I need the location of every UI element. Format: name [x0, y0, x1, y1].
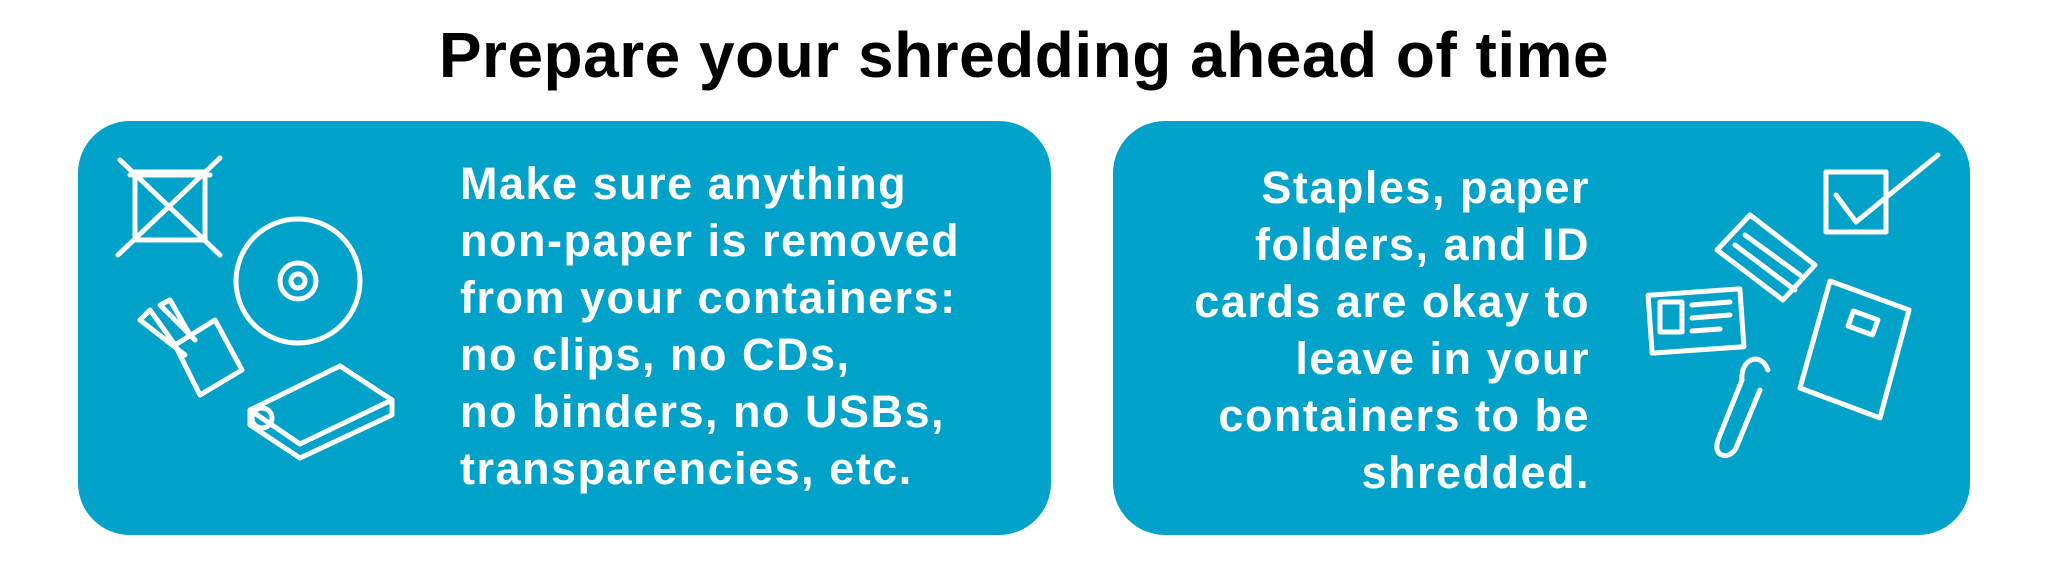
text: okay items: shredded. [1361, 447, 1590, 498]
text: remove non-paper items: from your containers: [460, 272, 957, 323]
text: remove non-paper items: no binders, no USBs, [460, 386, 945, 437]
icon: ring binder [250, 366, 392, 458]
text: remove non-paper items: no clips, no CDs, [460, 329, 851, 380]
text: okay items: Staples, paper [1261, 162, 1590, 213]
text: remove non-paper items: Make sure anything [460, 158, 907, 209]
icon: binder clip [140, 300, 242, 395]
text: remove non-paper items: non-paper is removed [460, 215, 960, 266]
text: okay items: containers to be [1218, 390, 1590, 441]
text: remove non-paper items [460, 158, 960, 494]
icon: crossed box [118, 158, 220, 255]
text: remove non-paper items: transparencies, etc. [460, 443, 913, 494]
text: okay items: leave in your [1295, 333, 1590, 384]
icon: ID card [1648, 289, 1744, 353]
text: okay items: folders, and ID [1255, 219, 1590, 270]
icon: checked box [1826, 155, 1938, 232]
text: okay items: cards are okay to [1194, 276, 1590, 327]
text: okay items [1194, 162, 1590, 498]
icon: credit card [1717, 215, 1815, 300]
icon: paper clip [1717, 359, 1768, 456]
title: Prepare your shredding ahead of time [439, 19, 1609, 91]
panel: remove non-paper [78, 121, 1051, 535]
icon: notebook [1800, 281, 1909, 418]
icon: CD [236, 219, 360, 343]
panel: okay to leave [1113, 121, 1970, 535]
